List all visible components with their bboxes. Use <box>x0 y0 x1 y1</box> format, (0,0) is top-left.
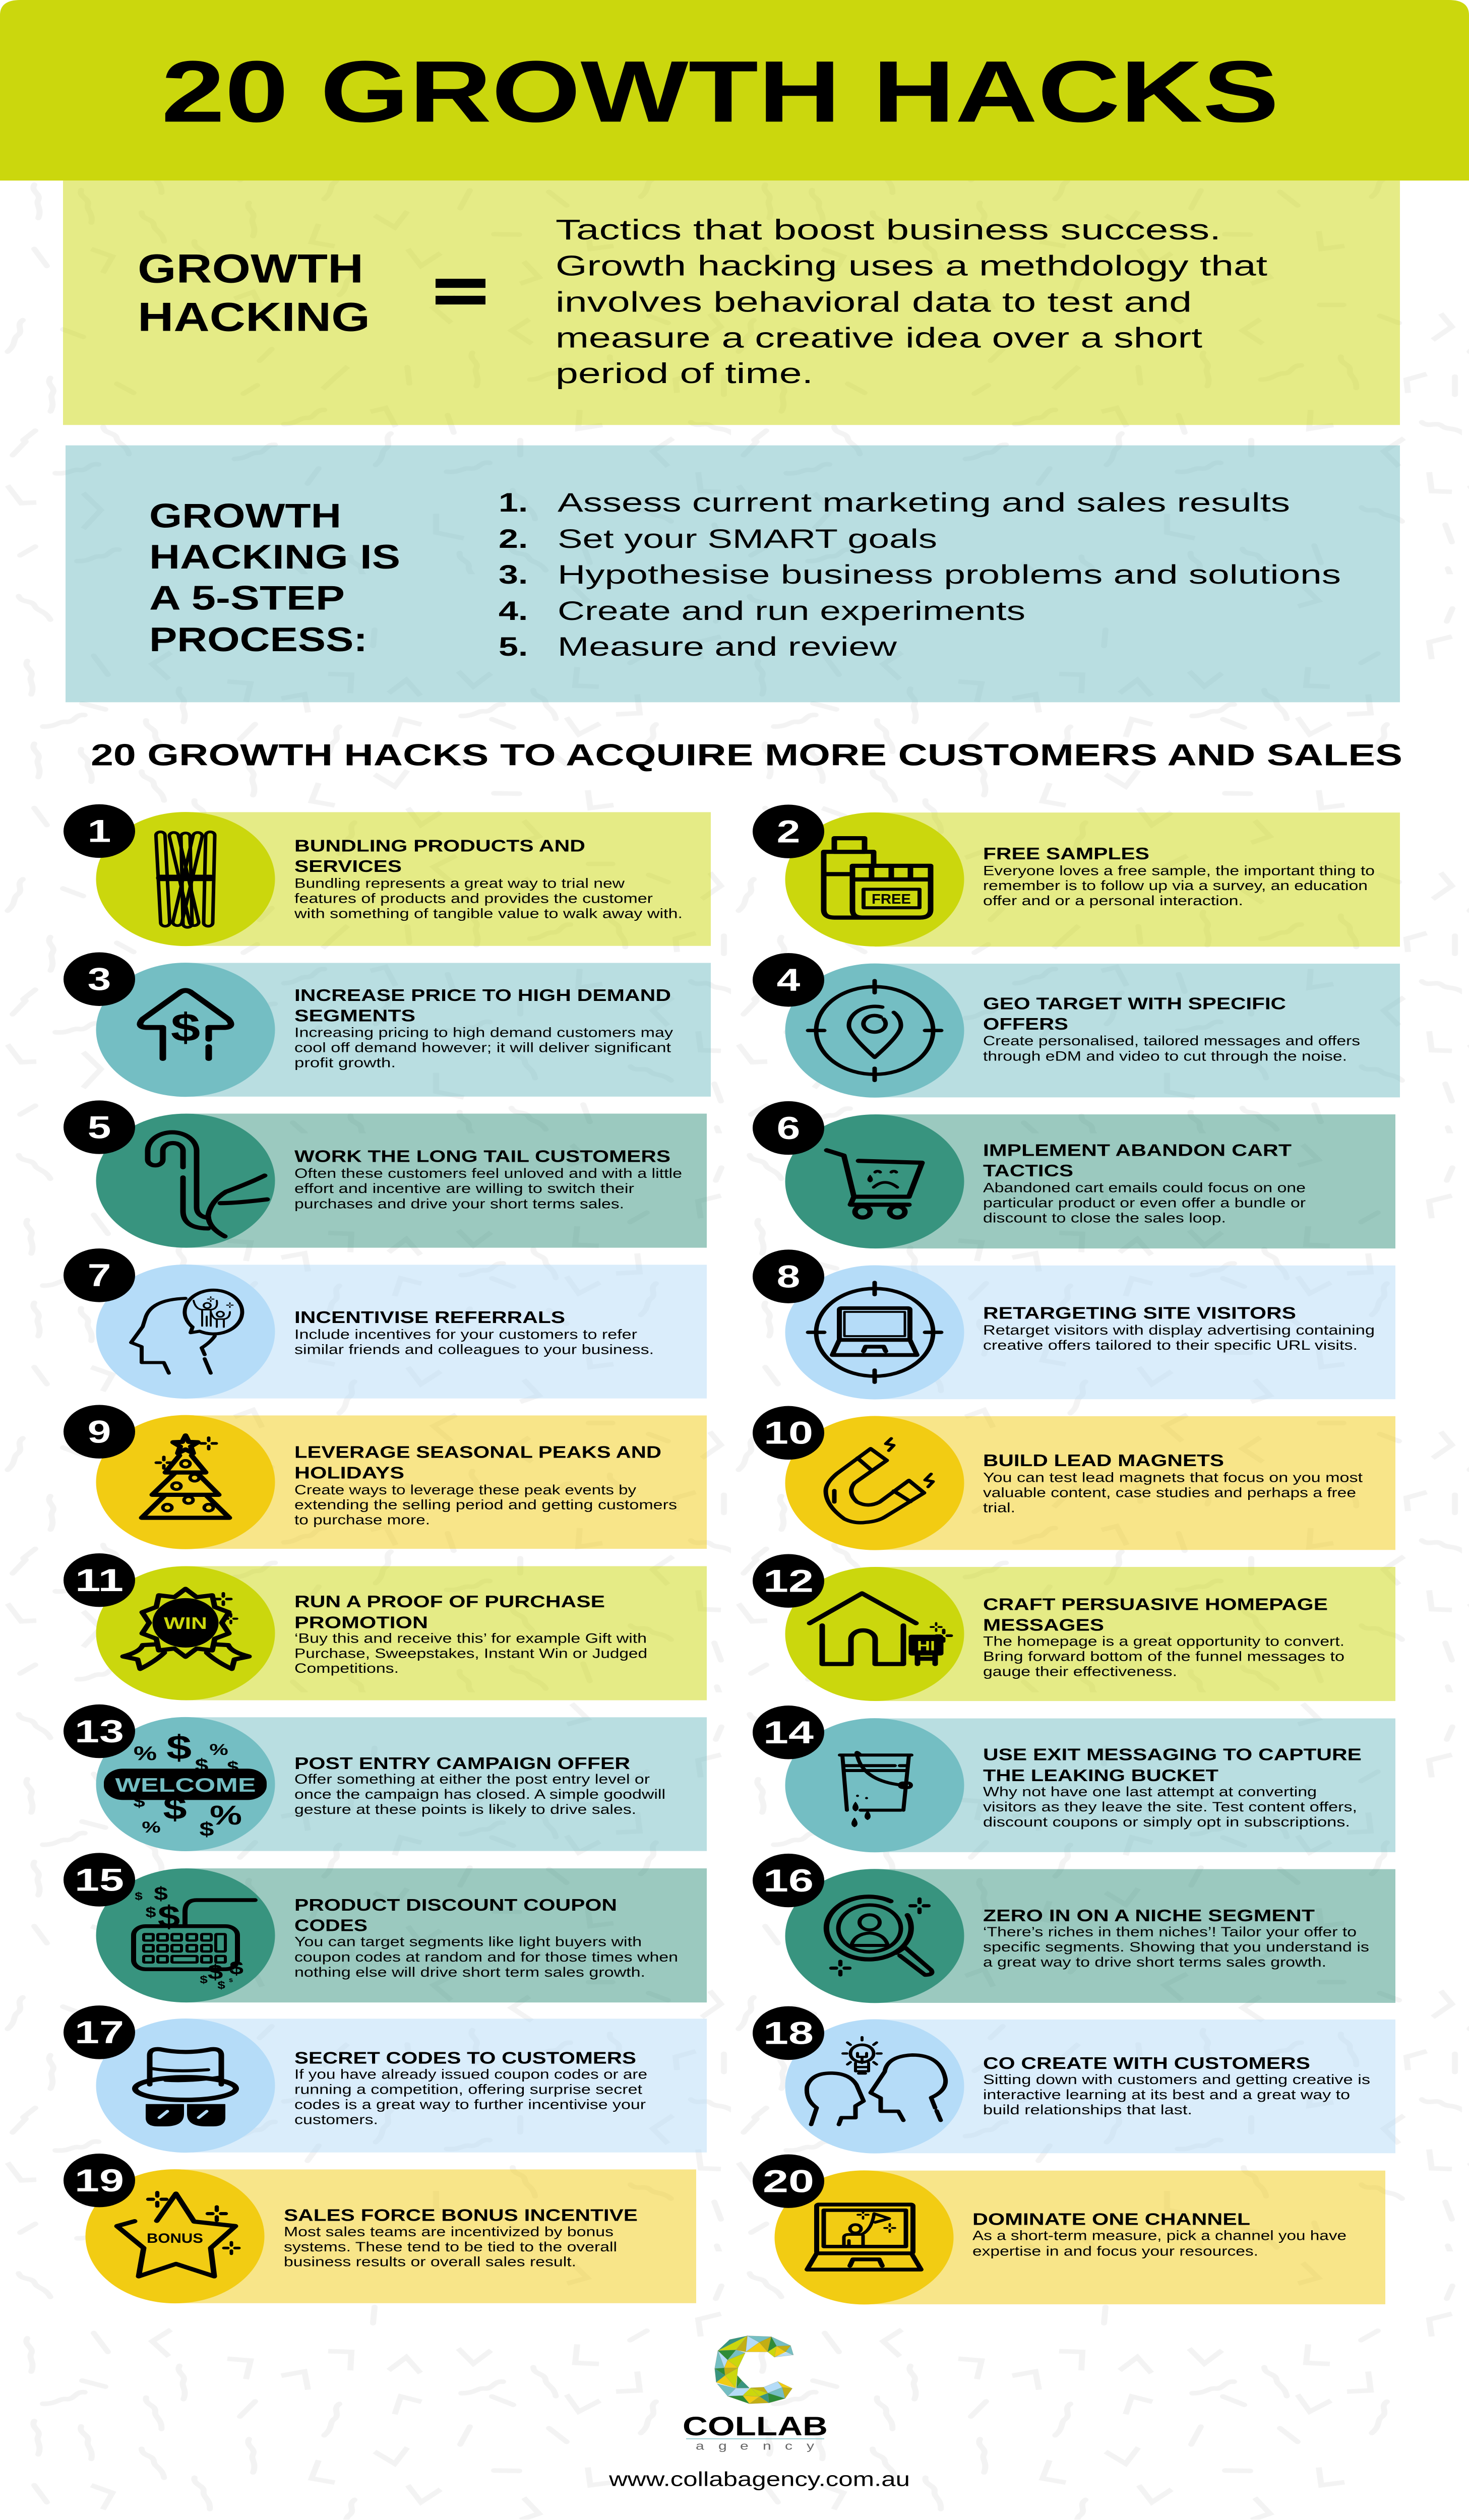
icon: location target <box>808 981 941 1081</box>
numbered steps: 4. <box>499 596 528 626</box>
card 1: bundling products <box>64 804 711 946</box>
number badge 8: 8 <box>777 1259 800 1294</box>
card text: discount coupons or simply opt in subscriptions. <box>983 1814 1350 1830</box>
icon: head with referral thought <box>131 1290 242 1373</box>
card text: discount to close the sales loop. <box>983 1210 1226 1225</box>
card text: trial. <box>983 1500 1015 1515</box>
icon: house with sign <box>810 1593 951 1664</box>
header banner <box>0 0 1469 180</box>
icon: keyboard with dollar signs: $ <box>217 1980 225 1991</box>
number badge 15 <box>64 1853 135 1907</box>
definition text <box>556 214 1267 390</box>
card text: PROMOTION <box>294 1613 428 1632</box>
card 15: coupon codes <box>64 1853 707 2002</box>
card text: ‘There’s riches in them niches’! Tailor your offer to <box>983 1924 1357 1939</box>
heading: 5-step process <box>149 496 400 659</box>
card text: BUILD LEAD MAGNETS <box>983 1451 1224 1470</box>
card text: Competitions. <box>294 1660 399 1676</box>
card text <box>294 1896 678 1980</box>
icon: bonus star <box>117 2192 239 2277</box>
card text: to purchase more. <box>294 1512 430 1527</box>
heading: growth hacking <box>138 246 370 340</box>
card text: purchases and drive your short terms sales. <box>294 1196 624 1212</box>
panel: 5-step process <box>66 446 1400 702</box>
number badge 9 <box>64 1405 135 1459</box>
card text: THE LEAKING BUCKET <box>983 1766 1218 1785</box>
icon: horseshoe magnet <box>826 1438 933 1523</box>
card text: GEO TARGET WITH SPECIFIC <box>983 994 1286 1013</box>
card text: Most sales teams are incentivized by bonus <box>284 2224 614 2239</box>
card 8: retargeting <box>753 1249 1395 1400</box>
card text <box>294 986 673 1070</box>
card 20: dominate one channel <box>753 2154 1385 2304</box>
card text: Why not have one last attempt at converting <box>983 1784 1317 1799</box>
icon: keyboard with dollar signs: $ <box>229 1977 233 1983</box>
number badge 11: 11 <box>75 1562 124 1598</box>
icon: keyboard with dollar signs: $ <box>154 1883 168 1904</box>
card text: Everyone loves a free sample, the important thing to <box>983 863 1375 878</box>
numbered steps: 5. <box>499 633 528 662</box>
definition text: Growth hacking uses a methdology that <box>556 250 1267 282</box>
card text: a great way to drive short terms sales growth. <box>983 1954 1326 1970</box>
card text: SEGMENTS <box>294 1006 415 1025</box>
icon: bundle of sticks <box>156 832 215 927</box>
section heading: 20 GROWTH HACKS TO ACQUIRE MORE CUSTOMERS AND SALES <box>91 738 1402 772</box>
card text: profit growth. <box>294 1055 396 1070</box>
card text <box>983 1304 1375 1353</box>
card 6: abandon cart <box>753 1101 1395 1248</box>
card text: Offer something at either the post entry level or <box>294 1772 650 1787</box>
card text <box>972 2210 1346 2258</box>
card text: INCREASE PRICE TO HIGH DEMAND <box>294 986 671 1005</box>
number badge 14 <box>753 1706 824 1759</box>
card 18: co create <box>753 2006 1395 2154</box>
heading: 5-step process: GROWTH <box>149 496 341 535</box>
card text <box>983 844 1375 908</box>
card text: gesture at these points is likely to drive sales. <box>294 1802 636 1817</box>
card text: FREE SAMPLES <box>983 844 1149 863</box>
icon: win badge <box>123 1589 249 1669</box>
card text: Abandoned cart emails could focus on one <box>983 1180 1306 1195</box>
card text: WORK THE LONG TAIL CUSTOMERS <box>294 1147 670 1166</box>
icon: christmas tree <box>142 1435 229 1518</box>
card 2: free samples <box>753 804 1400 947</box>
card text: interactive learning at its best and a great way to <box>983 2087 1350 2102</box>
definition text: period of time. <box>556 357 813 390</box>
card text: ZERO IN ON A NICHE SEGMENT <box>983 1906 1315 1925</box>
card 12: homepage messages <box>753 1554 1395 1701</box>
icon: welcome sign with currency <box>104 1728 267 1840</box>
definition text: Tactics that boost business success. <box>556 214 1221 246</box>
number badge 17 <box>64 2005 135 2059</box>
icon: welcome sign with currency: % <box>142 1818 161 1836</box>
number badge 13: 13 <box>75 1714 124 1749</box>
card text: BUNDLING PRODUCTS AND <box>294 837 585 855</box>
card text: INCENTIVISE REFERRALS <box>294 1308 565 1327</box>
number badge 11 <box>64 1553 135 1607</box>
number badge 10 <box>753 1406 824 1460</box>
numbered steps: Set your SMART goals <box>558 524 937 554</box>
number badge 20: 20 <box>763 2164 814 2199</box>
card text: LEVERAGE SEASONAL PEAKS AND <box>294 1443 661 1462</box>
card text: OFFERS <box>983 1015 1068 1034</box>
card text: Create ways to leverage these peak events by <box>294 1482 636 1497</box>
number badge 7: 7 <box>88 1257 111 1293</box>
card 14: exit messaging <box>753 1706 1395 1852</box>
number badge 18 <box>753 2006 824 2060</box>
number badge 19: 19 <box>75 2163 124 2198</box>
card text: remember is to follow up via a survey, an education <box>983 877 1368 893</box>
card text: Include incentives for your customers to refer <box>294 1327 637 1342</box>
card text: CODES <box>294 1916 368 1935</box>
number badge 5 <box>64 1100 135 1154</box>
number badge 1: 1 <box>88 813 111 849</box>
heading: 5-step process: PROCESS: <box>149 620 368 659</box>
icon: welcome sign with currency: $ <box>200 1818 214 1840</box>
number badge 16 <box>753 1854 824 1907</box>
card text: IMPLEMENT ABANDON CART <box>983 1141 1292 1160</box>
icon: keyboard with dollar signs <box>134 1883 255 1991</box>
card text <box>294 837 683 921</box>
number badge 8 <box>753 1249 824 1303</box>
title: 20 GROWTH HACKS <box>161 43 1279 141</box>
card text: TACTICS <box>983 1161 1073 1180</box>
number badge 5: 5 <box>88 1109 111 1145</box>
card text: RUN A PROOF OF PURCHASE <box>294 1592 605 1611</box>
heading: growth hacking: GROWTH <box>138 246 363 291</box>
logo tagline: agency <box>696 2439 815 2452</box>
logo mark: low-poly C <box>715 2336 793 2404</box>
number badge 2 <box>753 804 824 858</box>
website url: www.collabagency.com.au <box>608 2468 910 2490</box>
card text: particular product or even offer a bundle or <box>983 1195 1306 1210</box>
card text: offer and or a personal interaction. <box>983 893 1243 908</box>
card text <box>294 1592 647 1676</box>
card text: Create personalised, tailored messages and offers <box>983 1033 1360 1048</box>
card text: cool off demand however; it will deliver significant <box>294 1040 671 1055</box>
card text: Purchase, Sweepstakes, Instant Win or Judged <box>294 1646 647 1661</box>
icon: welcome sign with currency: $ <box>163 1790 187 1825</box>
card text: coupon codes at random and for those times when <box>294 1949 678 1965</box>
heading: 5-step process: A 5-STEP <box>149 579 345 617</box>
card text: systems. These tend to be tied to the overall <box>284 2239 617 2254</box>
number badge 12 <box>753 1554 824 1608</box>
card text <box>983 1595 1344 1679</box>
card 16: niche segment <box>753 1854 1395 2003</box>
card text: valuable content, case studies and perhaps a free <box>983 1485 1356 1500</box>
card text: SECRET CODES TO CUSTOMERS <box>294 2049 636 2067</box>
card text: effort and incentive are willing to switch their <box>294 1180 634 1196</box>
card text: Bundling represents a great way to trial new <box>294 875 625 891</box>
icon: laptop with flag <box>807 2204 921 2270</box>
card text: similar friends and colleagues to your business. <box>294 1342 654 1357</box>
card text <box>294 1443 677 1527</box>
icon: keyboard with dollar signs: $ <box>229 1958 243 1978</box>
card 7: referrals <box>64 1248 707 1399</box>
card text <box>983 1906 1369 1970</box>
card text <box>983 1451 1363 1515</box>
number badge 3 <box>64 953 135 1006</box>
card text <box>983 994 1360 1064</box>
icon: bonus star: BONUS <box>147 2230 203 2246</box>
icon: magnifier over person <box>826 1897 932 1975</box>
icon: welcome sign with currency: $ <box>166 1728 192 1767</box>
card text: specific segments. Showing that you understand is <box>983 1939 1369 1955</box>
card text: USE EXIT MESSAGING TO CAPTURE <box>983 1745 1362 1764</box>
card text: creative offers tailored to their specific URL visits. <box>983 1337 1358 1353</box>
card text: POST ENTRY CAMPAIGN OFFER <box>294 1754 630 1773</box>
card text: Bring forward bottom of the funnel messages to <box>983 1649 1344 1664</box>
card text <box>983 2054 1370 2117</box>
icon: welcome sign with currency: $ <box>195 1755 208 1776</box>
number badge 12: 12 <box>763 1563 814 1599</box>
panel: growth hacking definition <box>63 180 1400 425</box>
number badge 7 <box>64 1248 135 1302</box>
number badge 17: 17 <box>75 2014 124 2050</box>
card text: expertise in and focus your resources. <box>972 2243 1258 2258</box>
number badge 9: 9 <box>88 1414 111 1450</box>
icon: keyboard with dollar signs: $ <box>200 1974 208 1986</box>
card text <box>284 2206 638 2269</box>
number badge 13 <box>64 1705 135 1758</box>
icon: keyboard with dollar signs: $ <box>145 1905 156 1921</box>
icon: free sample jar and box: FREE <box>872 891 911 907</box>
icon: welcome sign with currency: $ <box>227 1758 239 1776</box>
icon: long tail <box>148 1132 267 1236</box>
card text <box>294 2049 647 2127</box>
card 4: geo target <box>753 953 1400 1098</box>
card text: DOMINATE ONE CHANNEL <box>972 2210 1250 2229</box>
logo: collab agency <box>683 2336 828 2452</box>
card text: As a short-term measure, pick a channel you have <box>972 2228 1346 2243</box>
card 19: sales bonus <box>64 2154 696 2303</box>
card text: MESSAGES <box>983 1616 1104 1634</box>
number badge 6: 6 <box>777 1110 800 1146</box>
card 11: proof of purchase <box>64 1553 707 1700</box>
card text: Retarget visitors with display advertising containing <box>983 1322 1375 1338</box>
number badge 16: 16 <box>763 1863 814 1898</box>
card text <box>294 1754 665 1817</box>
card text: with something of tangible value to walk away with. <box>294 906 683 921</box>
number badge 14: 14 <box>763 1715 814 1750</box>
number badge 3: 3 <box>88 962 111 997</box>
numbered steps: Assess current marketing and sales results <box>558 487 1290 518</box>
numbered steps: 2. <box>499 524 528 554</box>
number badge 15: 15 <box>75 1862 124 1898</box>
card text: extending the selling period and getting customers <box>294 1497 677 1512</box>
card text: The homepage is a great opportunity to convert. <box>983 1633 1344 1649</box>
number badge 2: 2 <box>777 814 800 849</box>
number badge 6 <box>753 1101 824 1155</box>
logo wordmark: COLLAB <box>683 2412 828 2441</box>
card text <box>294 1308 654 1357</box>
card text <box>294 1147 682 1212</box>
card text: business results or overall sales result. <box>284 2254 576 2269</box>
card 13: post entry offer <box>64 1705 707 1851</box>
card text: once the campaign has closed. A simple goodwill <box>294 1787 665 1802</box>
icon: price arrow up <box>140 990 231 1058</box>
card 5: long tail <box>64 1100 707 1248</box>
icon: spy hat and glasses <box>135 2049 236 2126</box>
icon: win badge: WIN <box>164 1614 207 1633</box>
card text: CO CREATE WITH CUSTOMERS <box>983 2054 1310 2073</box>
number badge 4: 4 <box>777 962 800 998</box>
numbered steps: 3. <box>499 560 528 590</box>
card text: Sitting down with customers and getting creative is <box>983 2071 1370 2087</box>
card text <box>983 1745 1362 1830</box>
number badge 1 <box>64 804 135 858</box>
number badge 4 <box>753 953 824 1006</box>
card text: HOLIDAYS <box>294 1464 404 1482</box>
card text: You can target segments like light buyers with <box>294 1934 642 1949</box>
icon: price arrow up: $ <box>171 1005 200 1050</box>
card text: customers. <box>294 2112 378 2127</box>
numbered steps: Create and run experiments <box>558 596 1025 626</box>
card text: Often these customers feel unloved and with a little <box>294 1165 682 1181</box>
card text: visitors as they leave the site. Test content offers, <box>983 1799 1357 1814</box>
card text: gauge their effectiveness. <box>983 1664 1177 1679</box>
numbered steps: 1. <box>499 488 528 518</box>
card text: RETARGETING SITE VISITORS <box>983 1304 1296 1322</box>
heading: 5-step process: HACKING IS <box>149 538 400 576</box>
icon: keyboard with dollar signs: $ <box>135 1891 143 1902</box>
icon: welcome sign with currency: % <box>209 1740 228 1758</box>
card text: ‘Buy this and receive this’ for example Gift with <box>294 1630 647 1646</box>
card text: nothing else will drive short term sales growth. <box>294 1965 645 1980</box>
number badge 10: 10 <box>764 1415 813 1451</box>
icon: laptop in target <box>808 1283 941 1382</box>
card text: SALES FORCE BONUS INCENTIVE <box>284 2206 638 2225</box>
icon: keyboard with dollar signs: $ <box>208 1961 223 1984</box>
card text: running a competition, offering surprise secret <box>294 2082 642 2097</box>
icon: welcome sign with currency: % <box>134 1742 157 1764</box>
card text: SERVICES <box>294 857 402 876</box>
card text: build relationships that last. <box>983 2102 1192 2117</box>
number badge 19 <box>64 2154 135 2207</box>
card 17: secret codes <box>64 2005 707 2153</box>
card text: Increasing pricing to high demand customers may <box>294 1025 673 1040</box>
numbered steps: Measure and review <box>558 632 897 662</box>
icon: house with sign: HI <box>917 1638 935 1654</box>
card text: features of products and provides the customer <box>294 891 653 906</box>
icon: leaking bucket <box>840 1752 911 1827</box>
heading: growth hacking: HACKING <box>138 294 370 340</box>
numbered steps: Hypothesise business problems and solutions <box>558 559 1341 590</box>
card text: If you have already issued coupon codes or are <box>294 2066 647 2082</box>
card text: CRAFT PERSUASIVE HOMEPAGE <box>983 1595 1328 1614</box>
definition text: involves behavioral data to test and <box>556 286 1192 318</box>
card text: PRODUCT DISCOUNT COUPON <box>294 1896 617 1915</box>
card text: through eDM and video to cut through the noise. <box>983 1048 1347 1064</box>
numbered steps <box>499 487 1341 662</box>
icon: welcome sign with currency: WELCOME <box>115 1774 256 1796</box>
icon: sad shopping cart <box>827 1150 922 1218</box>
icon: welcome sign with currency: % <box>210 1800 242 1831</box>
card text: codes is a great way to further incentivise your <box>294 2097 646 2112</box>
card text <box>983 1141 1306 1225</box>
card 10: lead magnets <box>753 1406 1395 1550</box>
number badge 20 <box>753 2154 824 2208</box>
icon: welcome sign with currency: $ <box>133 1792 145 1810</box>
icon: two heads with lightbulb <box>807 2037 946 2124</box>
card 9: seasonal peaks <box>64 1405 707 1549</box>
icon: free sample jar and box <box>824 838 931 918</box>
icon: keyboard with dollar signs: $ <box>158 1900 180 1933</box>
number badge 18: 18 <box>763 2015 814 2051</box>
card text: You can test lead magnets that focus on you most <box>983 1470 1363 1485</box>
definition text: measure a creative idea over a short <box>556 322 1202 354</box>
card 3: increase price <box>64 953 711 1097</box>
icon: equals sign <box>436 279 485 304</box>
